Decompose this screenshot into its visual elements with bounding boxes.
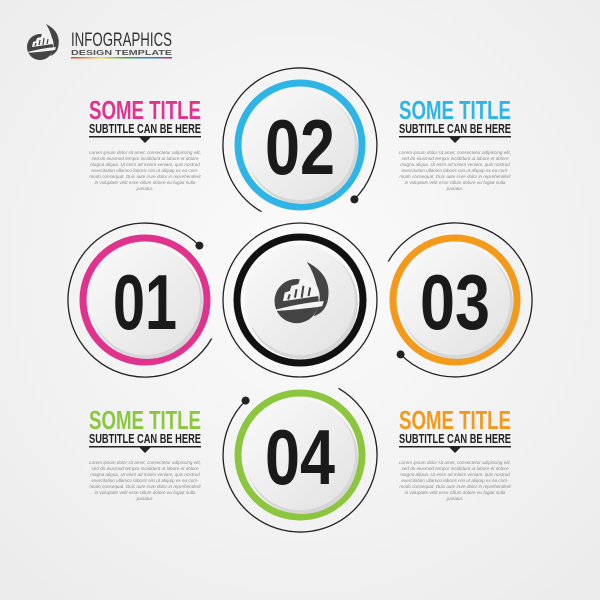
text block top-right: Lorem ipsum dolor sit amet, consectetur adipiscing elit, <box>399 150 511 155</box>
text block top-left: SOME TITLE <box>89 95 201 125</box>
text block bottom-right: modo consequat. Duis aute irure dolor in reprehenderit <box>399 484 511 489</box>
text block top-right: modo consequat. Duis aute irure dolor in reprehenderit <box>399 174 511 179</box>
text block bottom-right: pariatur. <box>446 496 463 501</box>
text block top-right: SUBTITLE CAN BE HERE <box>399 121 511 136</box>
circle 04 <box>238 393 362 517</box>
text block top-left: SUBTITLE CAN BE HERE <box>89 121 201 136</box>
text block bottom-left: exercitation ullamco laboris nisi ut aliquip ex ea com- <box>91 478 199 483</box>
text block bottom-right <box>399 405 511 501</box>
text block bottom-right: exercitation ullamco laboris nisi ut aliquip ex ea com- <box>401 478 509 483</box>
text block top-right: exercitation ullamco laboris nisi ut aliquip ex ea com- <box>401 168 509 173</box>
text block top-right: pariatur. <box>446 186 463 191</box>
text block bottom-left: sed do eiusmod tempor incididunt ut labore et dolore <box>92 466 199 471</box>
thin connector circles <box>68 68 532 532</box>
text block bottom-left: SOME TITLE <box>89 405 201 435</box>
header logo: DESIGN TEMPLATE <box>71 48 172 57</box>
text block top-left: modo consequat. Duis aute irure dolor in reprehenderit <box>89 174 201 179</box>
text block bottom-left <box>89 405 201 501</box>
text block bottom-left: pariatur. <box>136 496 153 501</box>
text block top-left: Lorem ipsum dolor sit amet, consectetur adipiscing elit, <box>89 150 201 155</box>
text block bottom-left: SUBTITLE CAN BE HERE <box>89 431 201 446</box>
text block top-left: sed do eiusmod tempor incididunt ut labore et dolore <box>92 156 199 161</box>
header title: INFOGRAPHICS <box>71 30 172 51</box>
circle 02: 02 <box>265 103 335 191</box>
text block top-left: magna aliqua. Ut enim ad minim veniam, quis nostrud <box>90 162 200 167</box>
header logo <box>24 24 172 60</box>
text block top-right <box>399 95 511 191</box>
icon: logo <box>24 24 59 60</box>
text block bottom-right: in voluptate velit esse cillum dolore eu fugiat nulla <box>405 490 506 495</box>
text block top-left: exercitation ullamco laboris nisi ut aliquip ex ea com- <box>91 168 199 173</box>
text block top-right: SOME TITLE <box>399 95 511 125</box>
text block top-left: pariatur. <box>136 186 153 191</box>
text block top-left: in voluptate velit esse cillum dolore eu fugiat nulla <box>95 180 196 185</box>
text block bottom-left: modo consequat. Duis aute irure dolor in reprehenderit <box>89 484 201 489</box>
text block top-right: sed do eiusmod tempor incididunt ut labore et dolore <box>402 156 509 161</box>
text block bottom-left: in voluptate velit esse cillum dolore eu fugiat nulla <box>95 490 196 495</box>
center circle with logo <box>237 237 363 363</box>
text block bottom-left: Lorem ipsum dolor sit amet, consectetur adipiscing elit, <box>89 460 201 465</box>
circle 02 <box>238 83 362 207</box>
text block bottom-right: magna aliqua. Ut enim ad minim veniam, quis nostrud <box>400 472 510 477</box>
text block top-left <box>89 95 201 191</box>
circle 01 <box>83 238 207 362</box>
circle 01: 01 <box>113 258 177 346</box>
text block top-right: in voluptate velit esse cillum dolore eu fugiat nulla <box>405 180 506 185</box>
text block bottom-right: SUBTITLE CAN BE HERE <box>399 431 511 446</box>
text block top-right: magna aliqua. Ut enim ad minim veniam, quis nostrud <box>400 162 510 167</box>
text block bottom-right: Lorem ipsum dolor sit amet, consectetur adipiscing elit, <box>399 460 511 465</box>
text block bottom-left: magna aliqua. Ut enim ad minim veniam, quis nostrud <box>90 472 200 477</box>
circle 03 <box>393 238 517 362</box>
circle 04: 04 <box>265 413 335 501</box>
text block bottom-right: sed do eiusmod tempor incididunt ut labore et dolore <box>402 466 509 471</box>
circle 03: 03 <box>420 258 490 346</box>
text block bottom-right: SOME TITLE <box>399 405 511 435</box>
